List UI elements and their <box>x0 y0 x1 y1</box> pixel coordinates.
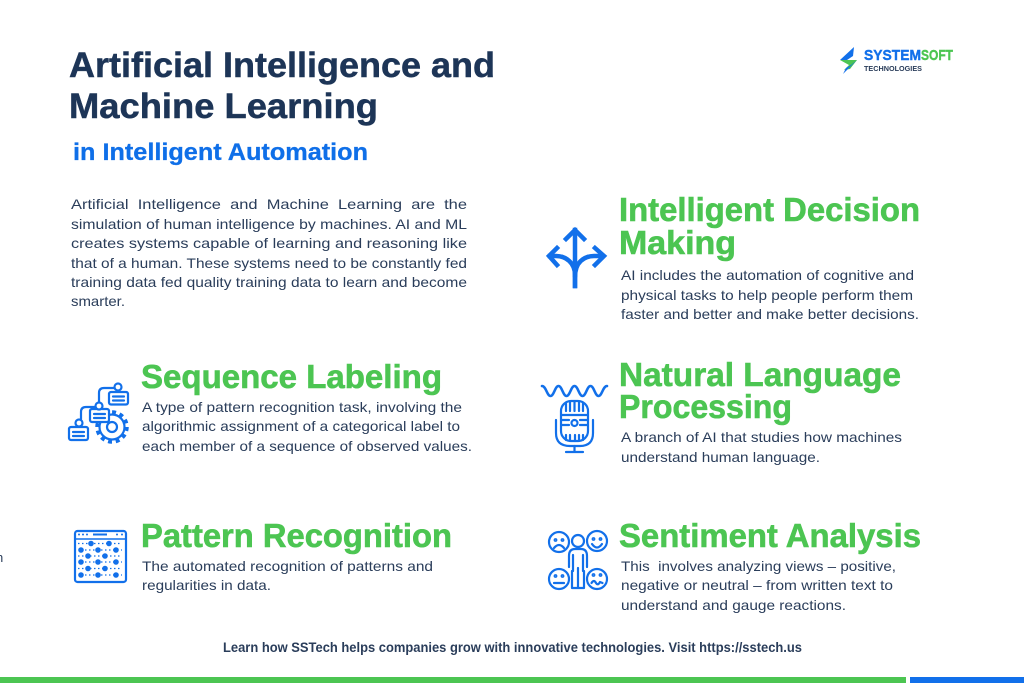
intro paragraph: simulation of human intelligence by machines. AI and ML <box>71 216 467 232</box>
heading: Sentiment Analysis <box>619 517 921 554</box>
title: Artificial Intelligence and <box>69 46 495 85</box>
intro paragraph: creates systems capable of learning and reasoning like <box>71 235 467 251</box>
panel: pattern recognition <box>75 517 452 593</box>
footer bar: green <box>0 677 906 683</box>
description: faster and better and make better decisions. <box>621 306 919 322</box>
heading <box>619 191 920 261</box>
logo: SOFT <box>921 47 953 64</box>
panel: natural language processing <box>542 356 902 465</box>
logo <box>840 47 953 74</box>
panel: intelligent decision making <box>549 191 920 322</box>
description: each member of a sequence of observed values. <box>142 438 472 454</box>
title: Machine Learning <box>69 87 378 126</box>
footer call to action: Learn how SSTech helps companies grow with innovative technologies. Visit https://sstech.us <box>223 640 802 655</box>
heading: Natural Language <box>619 356 901 393</box>
description: understand and gauge reactions. <box>621 597 846 613</box>
intro paragraph: smarter. <box>71 293 125 309</box>
panel: sentiment analysis <box>549 517 921 613</box>
description: negative or neutral – from written text to <box>621 577 893 593</box>
intro paragraph: Artificial Intelligence and Machine Learning are the <box>71 196 467 212</box>
description: regularities in data. <box>142 577 271 593</box>
description: A type of pattern recognition task, involving the <box>142 399 462 415</box>
logo: SYSTEM <box>864 47 921 64</box>
description: algorithmic assignment of a categorical label to <box>142 418 460 434</box>
heading <box>619 356 901 425</box>
description: AI includes the automation of cognitive and <box>621 267 914 283</box>
title <box>69 46 495 126</box>
icon: microphone with wave <box>542 386 607 452</box>
description: This involves analyzing views – positive, <box>621 558 896 574</box>
heading: Sequence Labeling <box>141 358 442 395</box>
description: A branch of AI that studies how machines <box>621 429 902 445</box>
description <box>621 429 902 465</box>
intro paragraph: training data fed quality training data to learn and become <box>71 274 467 290</box>
logo: TECHNOLOGIES <box>864 64 922 73</box>
description <box>621 267 919 322</box>
heading: Processing <box>619 388 792 425</box>
panel: sequence labeling <box>69 358 472 454</box>
icon: logo bolt <box>840 47 857 74</box>
description <box>142 558 433 593</box>
description: understand human language. <box>621 449 820 465</box>
intro paragraph: that of a human. These systems need to be constantly fed <box>71 255 467 271</box>
footer bar: blue <box>910 677 1024 683</box>
icon: person with emoji faces <box>549 531 607 589</box>
intro paragraph <box>71 196 467 309</box>
icon: dot grid window <box>75 531 126 582</box>
icon: three-way arrows <box>549 230 604 286</box>
description <box>142 399 472 454</box>
description: physical tasks to help people perform them <box>621 287 913 303</box>
heading: Making <box>619 224 736 261</box>
description <box>621 558 896 613</box>
heading: Intelligent Decision <box>619 191 920 228</box>
heading: Pattern Recognition <box>141 517 452 554</box>
description: The automated recognition of patterns and <box>142 558 433 574</box>
icon: flowchart with gear <box>69 384 128 442</box>
subtitle: in Intelligent Automation <box>73 139 368 166</box>
